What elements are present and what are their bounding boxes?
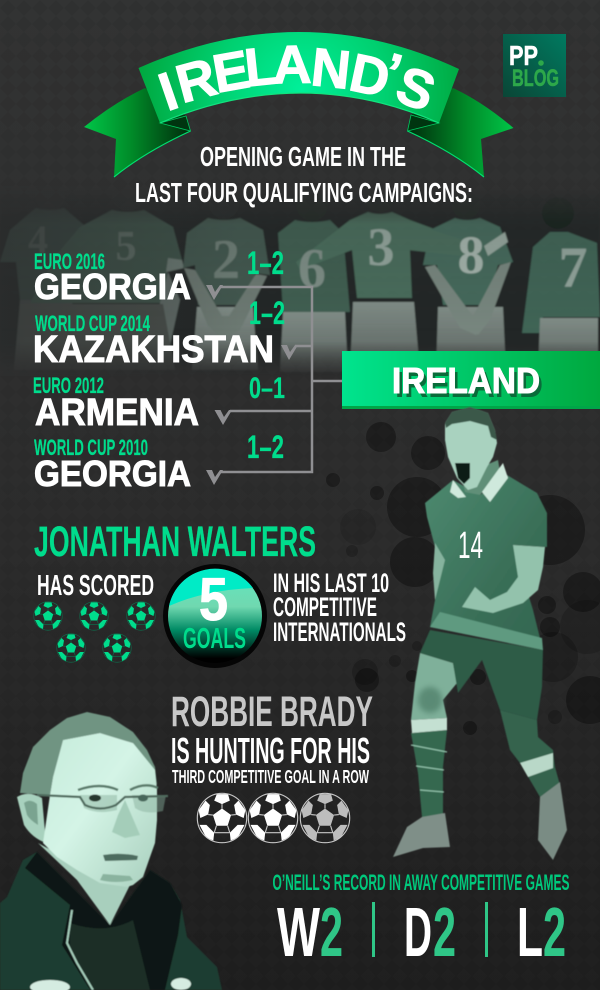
shirt numbers xyxy=(29,226,587,288)
left sock xyxy=(411,730,447,817)
zipper xyxy=(67,910,93,990)
record stats: L xyxy=(517,893,543,971)
Robbie Brady text: ROBBIE BRADY xyxy=(171,688,373,736)
shirt numbers: 7 xyxy=(558,235,588,300)
green balls xyxy=(34,602,155,662)
subtitle xyxy=(135,141,473,208)
hair xyxy=(20,712,157,795)
match: World Cup 2014 xyxy=(33,295,285,371)
shirt numbers: 2 xyxy=(212,229,240,291)
shirt numbers: 3 xyxy=(368,217,394,277)
Robbie Brady text: THIRD COMPETITIVE GOAL IN A ROW xyxy=(172,767,369,787)
match: Euro 2016: EURO 2016 xyxy=(34,249,105,274)
bracket xyxy=(206,285,342,485)
shirt number: 14 xyxy=(458,525,483,567)
sweater xyxy=(70,920,150,990)
in his last 10: IN HIS LAST 10 xyxy=(273,568,389,598)
in his last 10: INTERNATIONALS xyxy=(273,617,406,647)
left boot xyxy=(393,813,450,857)
white balls xyxy=(197,793,350,843)
name: Jonathan Walters: JONATHAN WALTERS xyxy=(34,518,316,566)
collar xyxy=(450,463,508,502)
match: Euro 2012: ARMENIA xyxy=(35,392,199,434)
background circles xyxy=(326,422,600,735)
banner title: S xyxy=(388,55,443,123)
logo: PP xyxy=(509,40,538,71)
record stats xyxy=(277,893,566,971)
right leg xyxy=(500,710,560,797)
shirt numbers: 5 xyxy=(116,224,136,270)
record stats: 2 xyxy=(543,893,566,971)
player 8 xyxy=(422,218,514,351)
Robbie Brady text xyxy=(171,688,373,787)
banner title: E xyxy=(208,39,254,105)
banner title: L xyxy=(242,35,281,99)
banner title: N xyxy=(308,37,353,101)
in his last 10 xyxy=(273,568,406,647)
match: Euro 2016: 1–2 xyxy=(247,245,284,281)
face xyxy=(43,733,157,887)
left ribbon tail xyxy=(84,88,190,177)
goals badge: GOALS xyxy=(183,623,246,655)
banner title: D xyxy=(344,43,395,109)
player 7 xyxy=(521,217,600,351)
banner title: R xyxy=(170,47,223,115)
shirt numbers: 8 xyxy=(458,225,484,285)
head xyxy=(445,407,497,490)
match: World Cup 2010: 1–2 xyxy=(247,429,284,465)
match: World Cup 2010: WORLD CUP 2010 xyxy=(34,435,148,460)
check marks xyxy=(206,285,298,485)
left arm xyxy=(433,543,445,600)
Robbie Brady text: IS HUNTING FOR HIS xyxy=(171,730,370,771)
match: World Cup 2014: 1–2 xyxy=(249,295,285,331)
neck xyxy=(38,843,130,925)
shorts xyxy=(420,630,543,720)
Ireland box: IRELAND xyxy=(392,360,540,401)
goals badge xyxy=(163,564,267,668)
has scored: HAS SCORED xyxy=(37,570,154,602)
player 6 xyxy=(277,220,351,370)
player 3 xyxy=(296,212,433,351)
Ireland box xyxy=(342,351,600,409)
match: Euro 2016: GEORGIA xyxy=(34,266,191,307)
shirt xyxy=(425,475,547,650)
ribbon band xyxy=(138,32,459,123)
banner title: A xyxy=(272,35,312,95)
right arm and hand xyxy=(462,545,545,613)
shirt numbers: 6 xyxy=(298,238,326,300)
logo: BLOG xyxy=(512,65,559,92)
match: World Cup 2014: WORLD CUP 2014 xyxy=(35,311,150,336)
record stats: W xyxy=(277,893,320,971)
banner title: ’ xyxy=(377,42,408,104)
O'Neill portrait xyxy=(0,712,222,990)
ear xyxy=(17,794,46,843)
banner title xyxy=(151,35,443,123)
jacket xyxy=(0,852,222,990)
banner title: I xyxy=(151,61,185,123)
record stats: 2 xyxy=(320,893,343,971)
logo xyxy=(503,34,566,97)
Ireland box: IRELAND xyxy=(395,364,543,405)
match: Euro 2016 xyxy=(34,245,284,307)
match: World Cup 2014: KAZAKHSTAN xyxy=(33,329,274,371)
player: Walters xyxy=(393,407,567,860)
in his last 10: COMPETITIVE xyxy=(273,592,377,622)
shirt numbers: 4 xyxy=(28,217,48,262)
subtitle: OPENING GAME IN THE xyxy=(200,141,406,172)
arm across player 8 xyxy=(411,250,426,252)
right boot xyxy=(538,782,567,860)
banner xyxy=(84,32,514,177)
match: Euro 2012: EURO 2012 xyxy=(33,373,104,398)
goals badge: 5 xyxy=(199,566,228,633)
jacket badges xyxy=(30,980,70,990)
right ribbon tail xyxy=(408,88,514,177)
player 4 xyxy=(0,209,83,360)
record stats: 2 xyxy=(433,893,456,971)
match: World Cup 2010 xyxy=(34,429,284,494)
match: World Cup 2010: GEORGIA xyxy=(34,453,191,494)
record stats: D xyxy=(404,893,432,971)
left thigh xyxy=(411,653,457,720)
glasses xyxy=(80,795,166,812)
player 2 xyxy=(183,218,270,370)
match: Euro 2012 xyxy=(33,372,285,434)
face shadows xyxy=(112,800,140,838)
player 5 xyxy=(68,210,184,368)
neck xyxy=(462,460,500,495)
team photo xyxy=(2,200,600,370)
match: Euro 2012: 0–1 xyxy=(249,372,285,405)
